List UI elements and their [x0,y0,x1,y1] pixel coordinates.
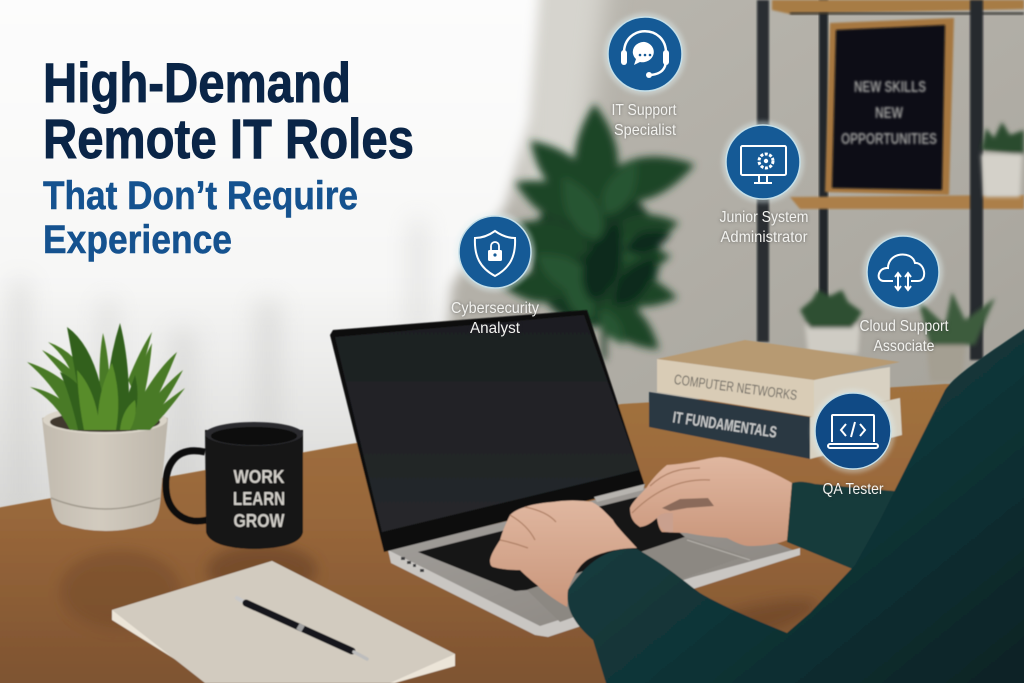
label [720,209,808,246]
sweater and person [568,316,1024,683]
label: QA Tester [822,481,884,498]
letter board: NEW [875,105,904,122]
mug text [233,466,285,531]
label: Administrator [720,229,808,246]
potted plant [27,323,185,531]
laptop base [386,488,800,637]
mug text: WORK [234,466,285,487]
label: Cybersecurity [451,300,539,317]
label [451,300,539,337]
pot [42,406,168,531]
role: QA Tester [811,389,895,498]
label [612,102,677,139]
book: IT Fundamentals [649,392,902,459]
leaves [27,323,185,430]
letter board: OPPORTUNITIES [841,131,937,148]
label: Junior System [720,209,808,226]
label [860,318,949,355]
icon: cloud with arrows [879,254,924,290]
laptop screen [330,310,645,552]
letter board: NEW SKILLS [854,79,926,96]
shelf plant [981,122,1024,197]
heading [43,51,414,170]
label: IT Support [612,102,677,119]
left hand [490,500,637,607]
books [649,340,902,459]
mug text: LEARN [233,488,285,509]
book: Computer Networks [657,340,900,417]
pen [237,598,367,659]
label: Specialist [614,122,676,139]
letter board [825,18,954,195]
role: IT Support Specialist [604,13,686,139]
icon: laptop with code [828,415,878,448]
heading: Remote IT Roles [43,107,414,170]
label: Analyst [470,320,521,337]
desk [0,384,1024,683]
label: Cloud Support [860,318,949,335]
role: Cybersecurity Analyst [451,212,539,337]
role: Cloud Support Associate [860,232,949,355]
icon: shield with lock [475,231,515,276]
background curtain [0,0,610,540]
title [43,51,414,262]
mug text: GROW [234,510,285,531]
book: IT Fundamentals: IT FUNDAMENTALS [671,409,778,442]
notebook [112,561,455,683]
subheading: Experience [43,218,232,262]
mug [166,422,303,549]
blurred floor plant [499,103,700,362]
subheading [43,174,358,262]
subheading: That Don’t Require [43,174,358,218]
heading: High-Demand [43,51,351,114]
hands [490,457,792,607]
label: Associate [874,338,935,355]
right hand [630,457,792,546]
role: Junior System Administrator [720,121,808,246]
photo scene foreground [0,310,1024,683]
laptop [330,310,800,637]
icon: headset [621,31,669,78]
book: Computer Networks: COMPUTER NETWORKS [673,371,798,403]
icon: monitor with gear [741,146,786,183]
shelf unit [757,0,1024,382]
lower shelf plants [800,290,995,382]
